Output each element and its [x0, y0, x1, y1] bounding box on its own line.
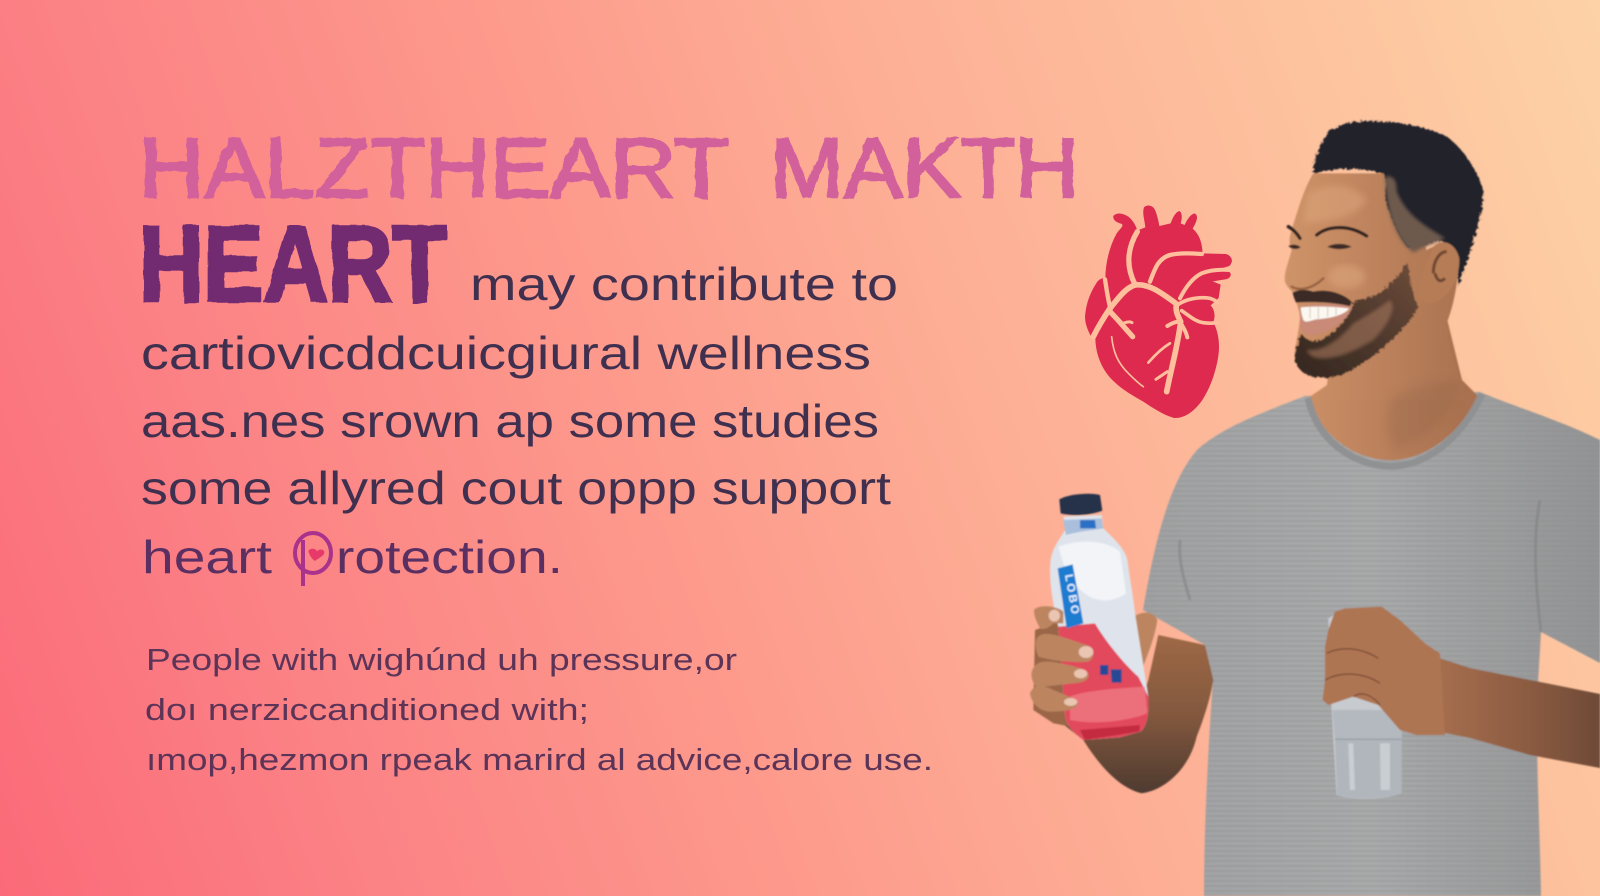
text block: main statement: heart: [142, 531, 272, 583]
title: decorative headline: MAKTH: [770, 121, 1079, 215]
mustache: [1293, 290, 1352, 307]
cheek highlight: [1328, 265, 1365, 288]
cap: [1059, 494, 1102, 515]
text block: caution note: doı nerziccanditioned with;: [145, 692, 589, 727]
mouth: [1300, 304, 1352, 335]
fingernails: [1049, 610, 1093, 706]
collar: [1308, 394, 1482, 466]
eyebrows: [1288, 227, 1367, 238]
title: decorative headline: HALZTHEART: [139, 121, 729, 215]
nose shadow: [1292, 278, 1323, 289]
head: [1285, 121, 1483, 400]
heading: HEART: HEART: [139, 203, 447, 324]
t-shirt: [1143, 392, 1600, 896]
thumb: [1133, 613, 1157, 670]
plastic bottle: [1050, 494, 1149, 740]
left arm and hand, bottle: [1030, 494, 1445, 799]
fingers: [1030, 606, 1093, 712]
red label marks: [1100, 665, 1122, 683]
forehead highlight: [1303, 186, 1367, 223]
plastic bottle: LOBO: [1062, 573, 1081, 615]
text block: caution note: [145, 642, 933, 777]
ear: [1419, 242, 1459, 303]
neck: [1308, 290, 1478, 460]
beard texture: [1307, 300, 1393, 358]
upper arm and forearm: [1053, 635, 1213, 793]
text block: main statement: [141, 258, 898, 583]
icon: heart letter P: [295, 533, 331, 586]
right hand: [1323, 607, 1445, 735]
icon: anatomical heart: [1085, 206, 1232, 418]
hair: [1313, 121, 1483, 287]
text block: main statement: cartiovicddcuicgiural wellness: [141, 327, 871, 379]
title: decorative headline: [139, 121, 1079, 215]
text block: main statement: some allyred cout oppp support: [141, 462, 891, 514]
bottle highlight: [1058, 542, 1126, 600]
blue label: [1058, 564, 1083, 628]
bottle shoulder shade: [1063, 518, 1103, 535]
beard: [1295, 262, 1418, 378]
text block: caution note: ımop,hezmon rpeak marird al advice,calore use.: [146, 742, 933, 777]
glass cup: [1328, 610, 1402, 799]
side fade: [1385, 176, 1445, 253]
text block: main statement: rotection.: [336, 531, 563, 583]
text block: main statement: may contribute to: [470, 258, 898, 310]
figure: smiling man with bottles: [1030, 121, 1600, 896]
text block: main statement: aas.nes srown ap some studies: [141, 395, 879, 447]
eyes: [1288, 244, 1352, 249]
red liquid: [1058, 623, 1149, 740]
face skin: [1285, 173, 1470, 400]
palm: [1033, 620, 1070, 727]
text block: caution note: People with wighúnd uh pressure,or: [146, 642, 737, 677]
bottle body: [1050, 515, 1149, 740]
right arm: [1430, 655, 1600, 768]
neck shadow: [1388, 381, 1462, 450]
